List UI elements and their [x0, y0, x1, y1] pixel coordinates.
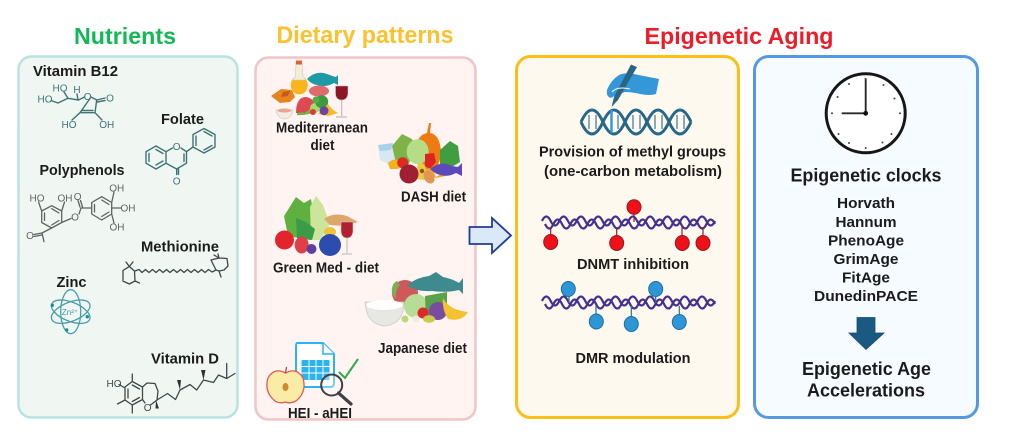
label: Vitamin D: Vitamin D — [151, 350, 219, 368]
label: Accelerations: Accelerations — [807, 380, 925, 400]
list: clock names: Hannum — [836, 214, 896, 231]
molecule: polyphenols — [26, 184, 136, 242]
molecule: polyphenols: O — [26, 231, 34, 242]
molecule: vitamin B12: O — [84, 92, 92, 103]
list: clock names: Horvath — [837, 195, 895, 212]
molecule: folate: O — [173, 176, 181, 188]
molecule: vitamin B12 — [38, 84, 114, 131]
panel: epigenetic clocks — [754, 56, 978, 418]
label: Japanese diet: Japanese diet — [378, 340, 467, 357]
label: diet: diet — [310, 137, 335, 154]
icon: HEI document with apple and magnifier — [267, 343, 358, 404]
molecule: vitamin B12: OH — [99, 120, 114, 131]
molecule: polyphenols: O — [74, 192, 82, 203]
molecule: polyphenols: O — [71, 212, 79, 224]
molecule: vitamin B12: HO — [52, 84, 68, 94]
molecule: vitamin D — [106, 364, 235, 414]
molecule: polyphenols: OH — [120, 204, 136, 214]
icon: DASH food — [378, 123, 462, 186]
molecule: vitamin D: HO — [106, 379, 122, 390]
icon: hand writing on DNA — [581, 64, 691, 134]
diagram: DMR modulation strand — [542, 282, 715, 332]
molecule: folate: O — [173, 142, 181, 153]
panel: epigenetic mechanisms — [516, 56, 738, 418]
label: Mediterranean diet: Mediterranean — [276, 120, 368, 136]
label: HEI - aHEI: HEI - aHEI — [288, 405, 352, 422]
molecule: polyphenols: OH — [110, 222, 124, 234]
label: DMR modulation: DMR modulation — [576, 350, 690, 367]
list: clock names — [814, 195, 918, 305]
label: Methionine: Methionine — [141, 238, 219, 256]
arrow: down — [849, 318, 884, 350]
label: Vitamin B12: Vitamin B12 — [33, 63, 118, 80]
icon: Mediterranean food — [271, 60, 348, 119]
molecule: vitamin B12: HO — [38, 94, 53, 106]
molecule: folate — [146, 128, 215, 188]
icon: Green Med food — [275, 196, 358, 256]
molecule: vitamin B12: H — [73, 85, 81, 96]
molecule: vitamin D: O — [144, 403, 152, 414]
list: clock names: PhenoAge — [828, 232, 904, 250]
icon: clock — [826, 74, 905, 153]
label: one-carbon metabolism: (one-carbon metabolism) — [544, 163, 722, 180]
molecule: polyphenols: HO — [30, 194, 45, 204]
list: clock names: FitAge — [842, 270, 890, 286]
molecule: polyphenols: OH — [58, 194, 72, 204]
label: Folate: Folate — [161, 111, 204, 128]
label: Polyphenols: Polyphenols — [40, 162, 124, 179]
molecule: vitamin B12: HO — [62, 120, 77, 131]
title: Nutrients: Nutrients — [74, 23, 176, 49]
label: Provision of methyl groups: Provision of methyl groups — [539, 144, 726, 160]
icon: zinc atom — [48, 290, 93, 334]
label: Green Med - diet: Green Med - diet — [273, 260, 379, 276]
title: Dietary patterns: Dietary patterns — [276, 22, 454, 49]
list: clock names: GrimAge — [834, 251, 898, 268]
label: Zinc: Zinc — [56, 274, 86, 291]
arrow: dietary patterns to epigenetic aging — [470, 218, 511, 253]
panel: dietary patterns — [256, 58, 476, 422]
title: Epigenetic Aging: Epigenetic Aging — [644, 23, 834, 49]
molecule: methionine — [123, 254, 228, 284]
list: clock names: DunedinPACE — [814, 288, 918, 305]
panel: nutrients — [18, 56, 238, 418]
icon: Japanese food — [365, 272, 468, 326]
label: Epigenetic clocks: Epigenetic clocks — [790, 166, 942, 186]
label: DASH diet: DASH diet — [401, 188, 466, 206]
molecule: polyphenols: OH — [109, 184, 124, 194]
molecule: vitamin B12: O — [106, 94, 114, 104]
icon: zinc atom: Zn²⁺ — [62, 308, 78, 317]
label: Epigenetic Age: Epigenetic Age — [802, 359, 931, 379]
diagram: DNMT inhibition strand — [542, 200, 715, 250]
label: DNMT inhibition: DNMT inhibition — [577, 256, 689, 273]
